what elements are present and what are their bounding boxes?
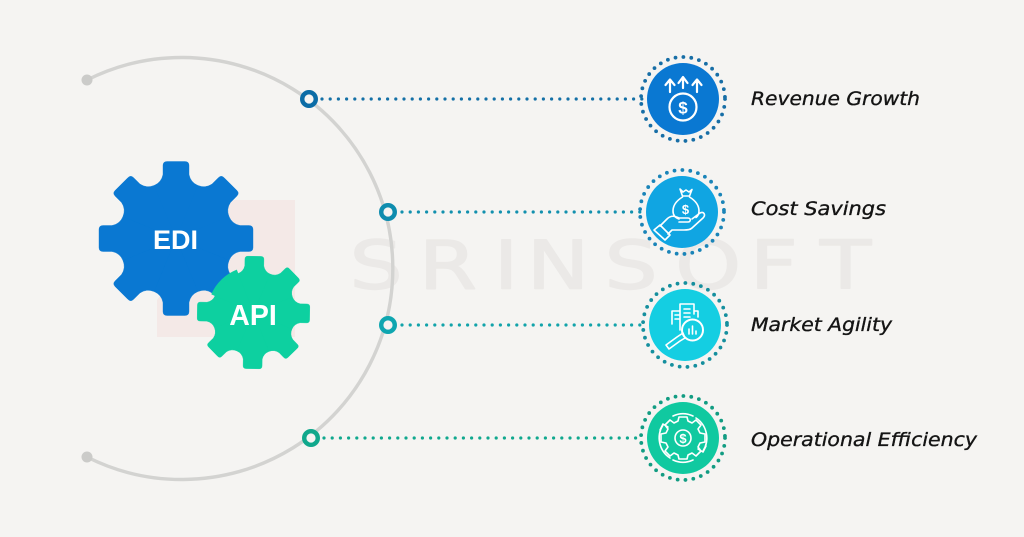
gear: API — [196, 255, 311, 370]
arc end dot: bottom — [82, 452, 92, 462]
badge: cost savings — [640, 170, 724, 254]
label: market agility: Market Agility — [751, 314, 893, 336]
label: operational efficiency: Operational Efficiency — [751, 429, 978, 451]
badge: revenue growth — [641, 57, 725, 141]
icon: gear with dollar and cycle arrows: $ — [679, 431, 687, 446]
watermark wordmark: SRINSOFT — [350, 227, 872, 304]
connector: market agility — [381, 318, 645, 332]
connector: cost savings — [381, 205, 640, 219]
badge: operational efficiency — [641, 396, 725, 480]
semicircular arc — [87, 58, 393, 479]
gear: API: API — [229, 300, 277, 332]
label: cost savings: Cost Savings — [751, 198, 886, 220]
gear: EDI — [99, 162, 253, 316]
icon: buildings and magnifier — [666, 304, 703, 349]
badge: market agility — [643, 283, 727, 367]
arc end dot: top — [82, 74, 92, 86]
connector: operational efficiency — [304, 431, 642, 445]
watermark logo mark — [157, 200, 295, 337]
icon: arrows and dollar coin: $ — [678, 98, 688, 118]
gear: EDI: EDI — [153, 225, 198, 255]
connector: revenue growth — [302, 92, 642, 106]
icon: money bag on hand: $ — [682, 202, 690, 217]
label: revenue growth: Revenue Growth — [751, 88, 920, 110]
